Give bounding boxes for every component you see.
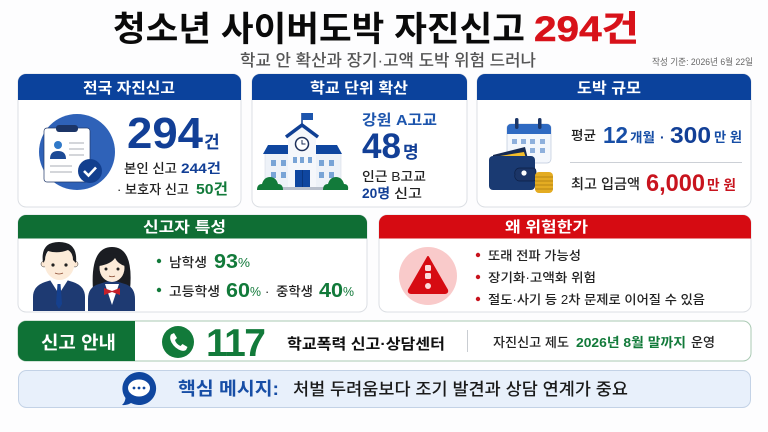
- panel: report guide: [18, 321, 751, 365]
- subtitle: 학교 안 확산과 장기·고액 도박 위험 드러나: [240, 51, 536, 70]
- stat: high school 60%, middle school 40%: %: [343, 284, 354, 299]
- school B count: [362, 186, 422, 201]
- guardian report count: · 보호자 신고: [117, 182, 189, 197]
- stat: high school 60%, middle school 40%: 중학생: [276, 284, 313, 299]
- panel: why it is dangerous: [379, 215, 751, 312]
- stat: high school 60%, middle school 40%: 40: [319, 280, 343, 302]
- heading: school spread: 학교 단위 확산: [310, 80, 408, 97]
- guardian report count: 50건: [196, 181, 228, 198]
- panel: key message: [18, 370, 750, 408]
- big number 294: 건: [204, 133, 220, 152]
- heading: gambling scale: 도박 규모: [577, 80, 641, 97]
- average duration and amount: 12: [603, 122, 628, 148]
- maximum deposit: 최고 입금액: [571, 176, 640, 192]
- self-report count: 244건: [181, 161, 221, 176]
- average duration and amount: 평균: [571, 128, 596, 143]
- date note: 작성 기준: 2026년 6월 22일: [652, 56, 753, 67]
- stat: male students 93%: 93: [214, 251, 238, 273]
- average duration and amount: 300: [670, 122, 711, 148]
- icon: warning triangle: [399, 247, 457, 305]
- school B count: 20명: [362, 186, 390, 201]
- maximum deposit: [571, 170, 736, 197]
- stat: high school 60%, middle school 40%: [157, 280, 354, 302]
- school B count: 신고: [394, 186, 422, 201]
- self-report count: 본인 신고: [124, 161, 177, 176]
- big number 48: 명: [403, 143, 419, 162]
- heading: why it is dangerous: 왜 위험한가: [505, 219, 588, 236]
- phone number 117: 117: [206, 322, 266, 365]
- program deadline: [493, 335, 715, 350]
- average duration and amount: [571, 122, 742, 148]
- stat: high school 60%, middle school 40%: 60: [226, 280, 250, 302]
- stat: male students 93%: %: [238, 255, 250, 270]
- average duration and amount: ·: [660, 129, 665, 145]
- program deadline: 자진신고 제도: [493, 335, 569, 350]
- heading: national self-reports: 전국 자진신고: [83, 80, 175, 97]
- stat: high school 60%, middle school 40%: 고등학생: [169, 284, 220, 299]
- title: 294건: [534, 10, 639, 49]
- big number 48: 48: [362, 127, 401, 166]
- program deadline: 2026년 8월 말까지: [576, 335, 686, 350]
- icon: clipboard with check: [39, 114, 115, 190]
- maximum deposit: 만 원: [707, 177, 736, 193]
- key message text: 처벌 두려움보다 조기 발견과 상담 연계가 중요: [293, 380, 628, 399]
- key message label: 핵심 메시지:: [178, 379, 279, 399]
- average duration and amount: 개월: [630, 130, 655, 145]
- average duration and amount: 만 원: [714, 130, 742, 145]
- school B label: 인근 B고교: [362, 169, 426, 184]
- guardian report count: [117, 181, 228, 198]
- panel: national self-reports: [18, 74, 241, 207]
- big number 294: 294: [127, 109, 204, 158]
- risk: prolonged high stakes: 장기화·고액화 위험: [488, 270, 596, 285]
- program deadline: 운영: [691, 335, 715, 350]
- stat: male students 93%: 남학생: [169, 255, 207, 270]
- big number 48: [362, 127, 419, 166]
- panel: gambling scale: [477, 74, 751, 207]
- risk: secondary problems: 절도·사기 등 2차 문제로 이어질 수 있음: [488, 293, 705, 307]
- risk: peer spread: 또래 전파 가능성: [488, 249, 581, 263]
- school A label: 강원 A고교: [362, 112, 437, 129]
- self-report count: [124, 161, 221, 176]
- icon: female student: [88, 247, 135, 311]
- stat: high school 60%, middle school 40%: ·: [265, 284, 269, 299]
- icon: speech bubble: [122, 372, 156, 405]
- icon: calendar, wallet and coins: [489, 118, 553, 193]
- panel: reporter characteristics: [18, 215, 367, 312]
- title: 청소년 사이버도박 자진신고: [113, 11, 525, 49]
- stat: high school 60%, middle school 40%: %: [250, 284, 261, 299]
- icon: phone: [162, 326, 194, 358]
- maximum deposit: 6,000: [646, 170, 705, 197]
- heading: reporter characteristics: 신고자 특성: [143, 219, 226, 236]
- stat: male students 93%: [157, 251, 250, 273]
- panel: school spread: [252, 74, 467, 207]
- report center name: 학교폭력 신고·상담센터: [287, 336, 445, 353]
- heading: report guide: 신고 안내: [41, 333, 116, 353]
- icon: male student: [33, 242, 85, 311]
- icon: school building: [257, 113, 348, 190]
